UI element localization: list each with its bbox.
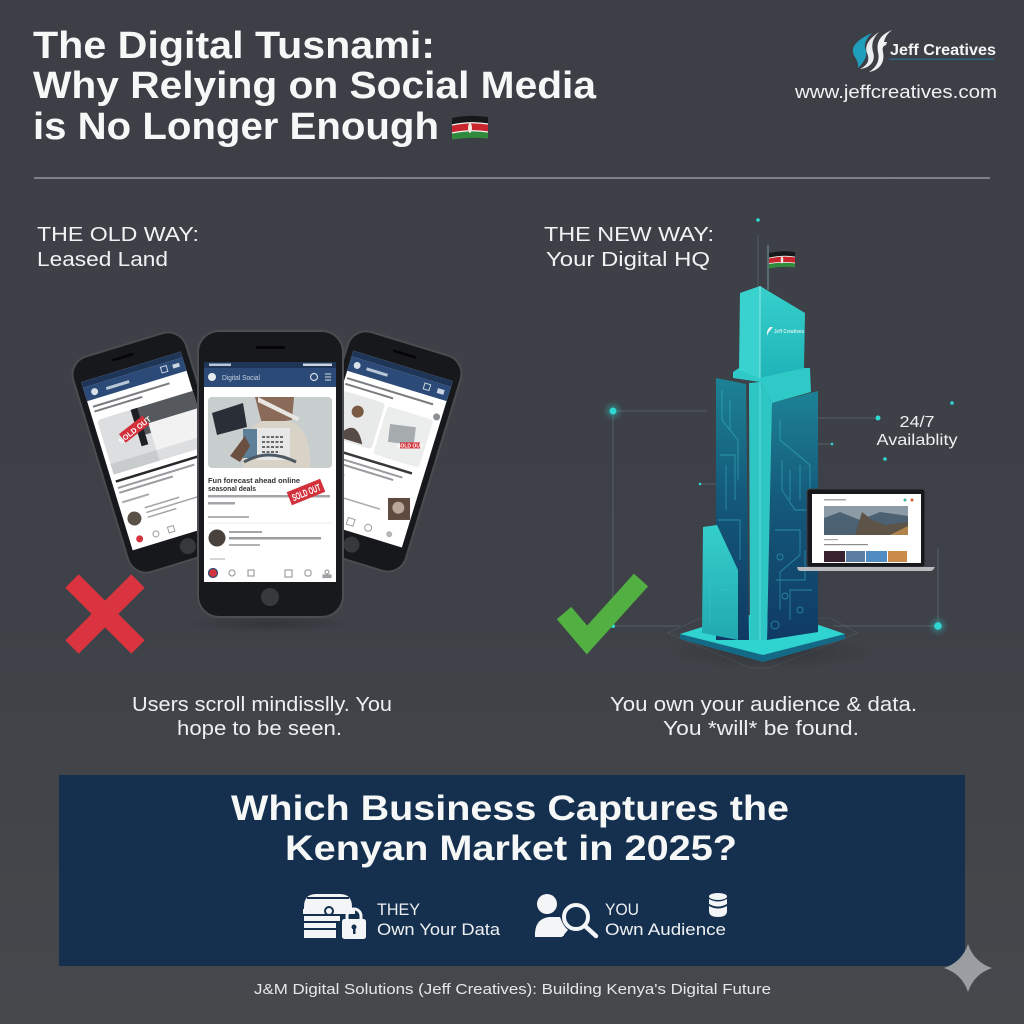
right circuit panel [767,391,818,640]
caption: new way: You *will* be found. [663,718,859,740]
caption: old way: hope to be seen. [177,718,342,740]
label: you own audience: YOU [605,901,639,919]
left phone: SOLD OUT [117,414,153,445]
central column [749,382,772,640]
phone feed text: seasonal deals [208,486,256,493]
website url: www.jeffcreatives.com [794,81,997,102]
banner heading: Which Business Captures the [231,789,789,828]
label: 24/7 availability [876,414,958,449]
tower logo: Jeff Creatives [774,329,804,335]
heading: old way [37,223,199,271]
sold out stamp: SOLD OUT [291,483,323,504]
network lines and nodes [606,218,954,668]
icon: database [709,893,727,917]
tower collar [733,368,811,403]
banner heading: Kenyan Market in 2025? [285,829,737,868]
banner background [59,775,965,966]
label: you own audience [605,901,726,939]
footer: J&M Digital Solutions (Jeff Creatives): Building Kenya's Digital Future [254,981,771,998]
title: The Digital Tusnami: [33,25,435,67]
center phone [198,331,343,617]
banner heading [231,789,789,868]
icon: treasure chest with lock [303,894,366,939]
heading: new way [544,223,714,271]
banner [59,775,965,966]
caption: new way [610,694,917,740]
phone nav icons [208,568,331,578]
phone feed text [208,478,332,560]
icon: Kenya flag in title [452,116,488,140]
left circuit panel [716,378,749,640]
logo mark [853,30,892,72]
heading: old way: THE OLD WAY: [37,223,199,246]
right phone [288,327,466,576]
label: 24/7 availability: Availablity [876,432,958,449]
laptop [797,489,935,571]
heading: old way: Leased Land [37,248,168,271]
tower logo [767,327,804,336]
center phone: Digital Social [222,375,260,382]
label: you own audience: Own Audience [605,921,726,939]
home button [261,588,279,606]
right phone: SOLD OUT [397,443,423,449]
caption: old way: Users scroll mindisslly. You [132,694,392,716]
heading: new way: Your Digital HQ [546,248,710,271]
sold out stamp [287,479,325,505]
label: they own your data [377,901,501,939]
left phone [68,328,246,577]
icon: red X [72,581,138,647]
caption: new way: You own your audience & data. [610,694,917,716]
phone feed text: Fun forecast ahead online [208,478,300,485]
caption: old way [132,694,392,740]
icon: sparkle star [944,944,992,992]
label: they own your data: THEY [377,901,420,919]
label: 24/7 availability: 24/7 [900,414,935,431]
shadow under center phone [185,615,355,633]
tower base [680,615,845,662]
tower [665,286,875,670]
logo wordmark: Jeff Creatives [890,42,996,59]
title [33,25,597,148]
panel: the old way [37,223,466,740]
title: is No Longer Enough [33,106,439,148]
logo: Jeff Creatives [853,30,996,72]
phone feed photo [208,397,332,468]
icon: person with magnifier [535,894,596,937]
tower shadow [665,634,875,670]
circuit traces [710,390,812,629]
label: they own your data: Own Your Data [377,921,501,939]
title: Why Relying on Social Media [33,65,597,107]
lower left block [702,525,738,640]
heading: new way: THE NEW WAY: [544,223,714,246]
tower top block [739,286,805,378]
flag pole [767,245,769,290]
logo tagline bar [889,58,994,60]
icon: green check [564,580,641,640]
panel: the new way [544,218,958,740]
icon: Kenya flag on tower [769,251,795,268]
